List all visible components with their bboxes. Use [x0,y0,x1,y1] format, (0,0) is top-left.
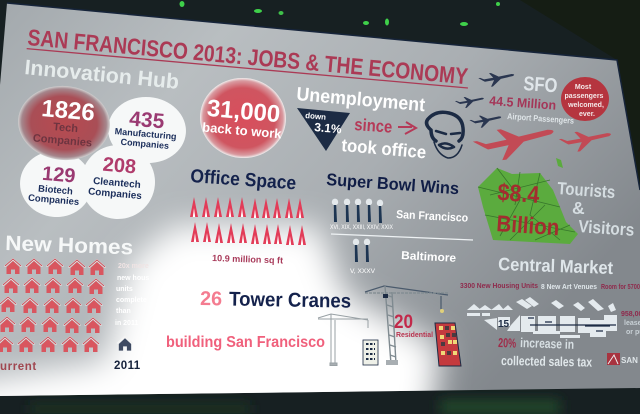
bubble: 129 biotech: Companies [28,193,80,208]
icon: Baltimore trophies [353,239,370,262]
text: 20 Residential [394,312,433,339]
text: 20 Residential: Residential [396,330,433,339]
text: building San Francisco: building San Francisco [166,334,325,351]
callout: 31,000 back to work: 31,000 [206,95,281,128]
bubble: 208 cleantech: Companies [88,186,143,202]
callout: most passengers: welcomed, [567,102,604,109]
callout: most passengers: Most [575,84,592,91]
panel: innovation hub bubbles [15,82,189,222]
heading: Unemployment: Unemployment [296,84,427,116]
text: new homes description [115,263,149,327]
text: $8.4 Billion: $8.4 [497,179,541,209]
text: 2011: 2011 [114,360,141,372]
callout: most passengers [561,77,609,121]
text: 44.5 Million: 44.5 Million [489,93,557,113]
heading: Innovation Hub: Innovation Hub [24,56,180,94]
text: $8.4 Billion: Billion [496,210,560,240]
bubble: 208 cleantech: Cleantech [93,176,141,191]
bubble: 435 manufacturing: Manufacturing [114,126,177,142]
text: Tourists & Visitors: Tourists [557,178,616,202]
text: housing units strip [460,281,640,291]
text: housing units strip: 8 New Art Venues [541,282,597,291]
bubble: 435 manufacturing [105,94,189,166]
callout: 31,000 back to work [197,74,289,162]
text: Baltimore: Baltimore [401,250,456,265]
icon: red building [435,323,461,366]
bubble: 129 biotech: 129 [41,163,76,188]
logo: San Francisco [607,353,640,365]
text: 20% increase: increase in [520,335,574,352]
heading: Central Market: Central Market [498,254,613,278]
icon: down triangle 3.1%: 3.1% [314,120,343,136]
bubble: 1826 tech: Tech [53,121,79,135]
icon: planes [455,71,612,164]
text: years Baltimore: V, XXXV [350,269,375,275]
arrow [398,122,416,134]
text: 20% increase: collected sales tax [501,353,593,370]
heading: 26 Tower Cranes: 26 [200,288,222,310]
text: $8.4 Billion [496,179,560,240]
icon: mayor face [427,112,463,158]
heading: 26 Tower Cranes: Tower Cranes [229,289,351,313]
text: new homes description: complete [116,297,147,304]
text: years SF: XVI, XIX, XXIII, XXIV, XXIX [330,225,393,231]
text: 958,000 leased [621,311,640,336]
text: 20 Residential: 20 [394,312,413,333]
chart: central market skyline: 15 [498,319,510,330]
text: new homes description: than [116,308,131,315]
bubble: 129 biotech [17,148,95,220]
callout: most passengers: ever. [579,111,595,118]
text: Tourists & Visitors [557,178,635,240]
icon: large crane [365,286,448,365]
text: took office: took office [341,135,427,162]
heading: New Homes: New Homes [5,232,134,259]
bubble: 1826 tech: 1826 [40,95,96,127]
text: new homes description: in 2011 [115,320,138,327]
bubble: 435 manufacturing: 435 [128,107,166,133]
icon: small building [363,340,378,365]
text: Tourists & Visitors: & [572,198,585,218]
chart: office tents [190,197,306,245]
bubble: 1826 tech: Companies [32,132,92,149]
text: 20% increase [498,335,593,370]
text: Airport Passengers: Airport Passengers [507,111,575,126]
icon: small crane [318,314,368,366]
bubble: 435 manufacturing: Companies [120,137,169,151]
text: housing units strip: 3300 New Housing Units [460,281,538,290]
bubble: 208 cleantech [78,142,158,222]
text: new homes description: new hous [117,275,149,282]
heading: Super Bowl Wins: Super Bowl Wins [326,170,460,198]
callout: 31,000 back to work: back to work [202,120,283,141]
text: 20% increase: 20% [498,335,517,351]
icon: 2011 house [116,335,134,351]
title: SAN FRANCISCO 2013: JOBS & THE ECONOMY [27,24,469,89]
chart: central market skyline [467,297,617,338]
bubble: 129 biotech: Biotech [38,183,73,197]
icon: San Francisco trophies [332,199,383,223]
bubble: 208 cleantech: 208 [102,154,137,178]
text: 10.9 million sq ft: 10.9 million sq ft [212,253,283,265]
bubble: 1826 tech [15,82,113,164]
icon: down triangle 3.1%: down [305,111,327,122]
text: new homes description: units [116,286,133,293]
map: san francisco [478,158,578,244]
callout: most passengers: passengers [565,93,604,100]
text: since: since [354,115,393,137]
heading: SFO: SFO [523,73,558,97]
chart: current homes grid [0,258,106,352]
text: San Francisco: San Francisco [396,209,468,225]
text: new homes description: 20x more [118,263,149,270]
divider [331,234,473,240]
heading: Office Space: Office Space [190,166,297,194]
icon: down triangle 3.1% [297,108,350,151]
text: current: urrent [0,361,37,373]
